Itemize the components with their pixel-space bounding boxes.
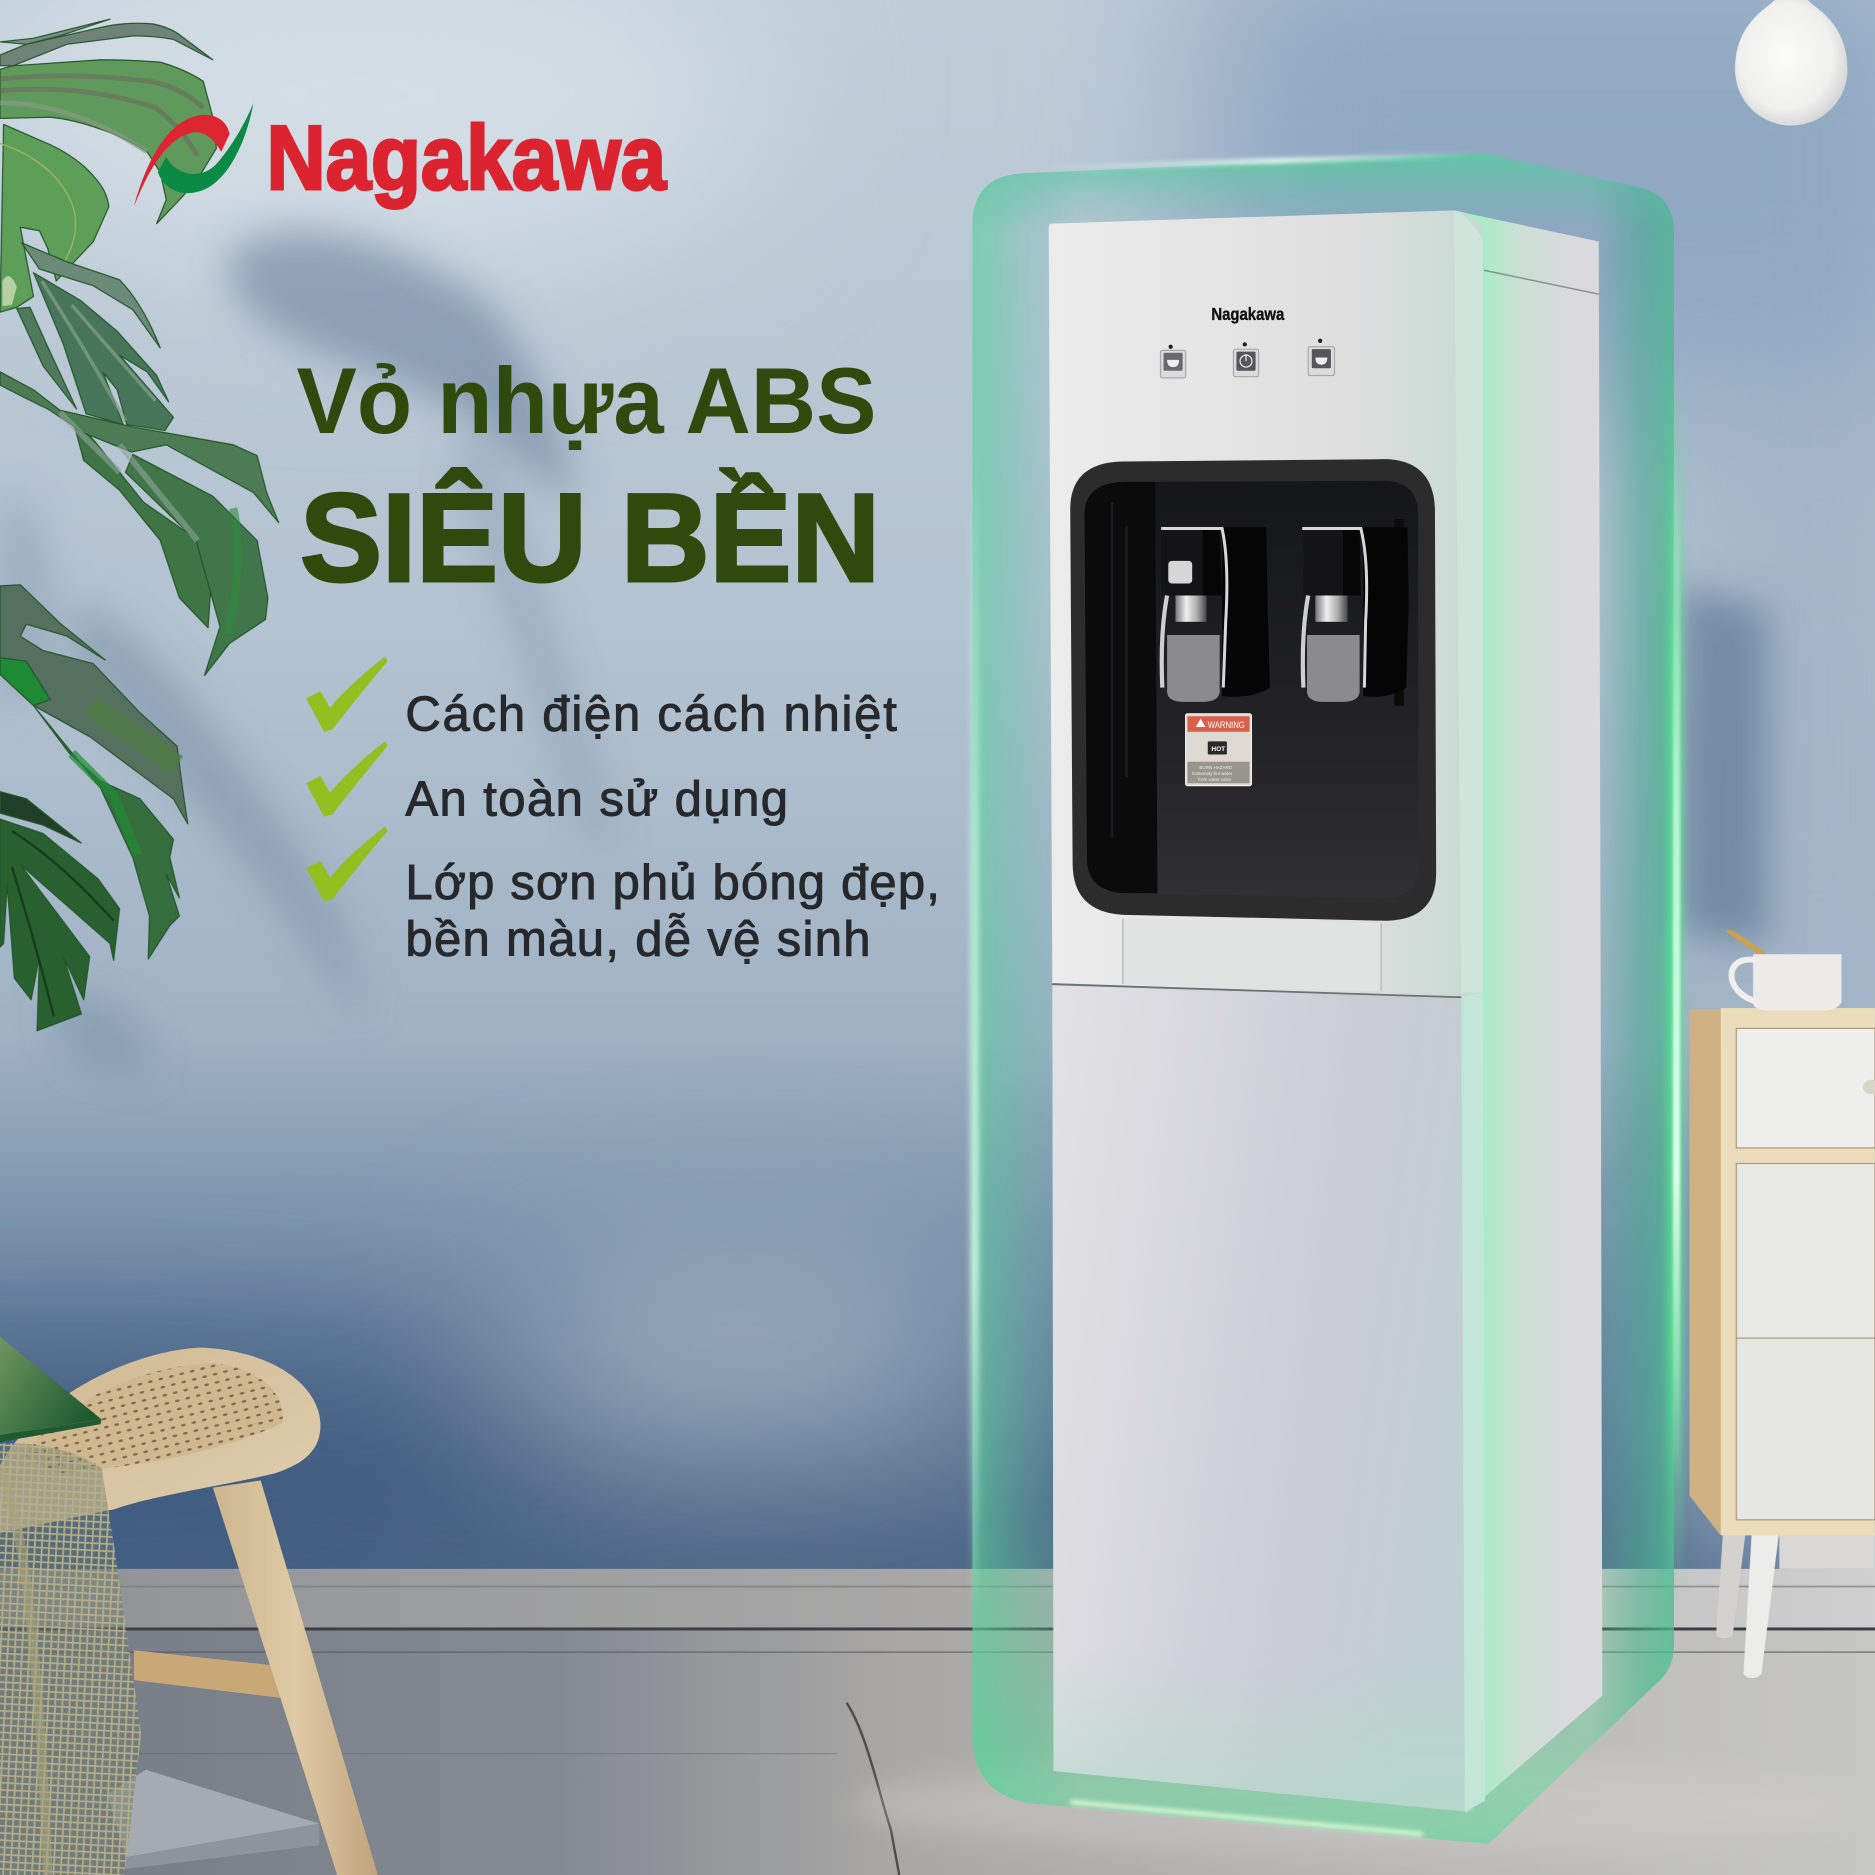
pendant light bulb [1735,0,1847,126]
logo [134,103,667,209]
button: power [1233,342,1259,377]
benefit 3 [405,856,940,966]
control buttons [1161,339,1335,378]
benefit 3: Lớp sơn phủ bóng đẹp, [405,856,940,910]
leaf: rounded lobe [0,124,109,312]
side cabinet with cup [1690,930,1875,1678]
leaf: top thin fronds [0,19,213,66]
warning sticker: Extremely hot water [1192,771,1233,776]
brand name on dispenser: Nagakawa [1211,304,1285,324]
leaf: small fronds [17,243,160,409]
stool seat [0,1348,320,1533]
benefits list [306,656,940,966]
logo mark [134,103,254,207]
stool [0,1337,378,1875]
cabinet legs [1716,1531,1875,1678]
warning sticker: from water valve [1198,777,1232,782]
book on stool [0,1337,102,1442]
cabinet body [1690,1008,1875,1535]
title line 1: Vỏ nhựa ABS [297,349,877,453]
glow line: top [1028,154,1483,169]
leaf: top broad [0,60,216,224]
dispenser upper front [1049,210,1483,997]
leaf: bottom monstera [0,792,120,1031]
drip tray front [1123,918,1381,991]
title line 2: SIÊU BỀN [300,467,880,608]
dispenser side panel [1454,210,1602,1813]
warning sticker: BURN HAZARD [1199,765,1233,770]
leaf: upper monstera [33,273,173,430]
left faucet [1161,527,1270,702]
check mark 2 [306,741,387,817]
warning sticker: HOT [1211,746,1225,753]
benefit 1: Cách điện cách nhiệt [405,688,897,742]
floor plate [108,1770,319,1869]
right faucet [1302,527,1409,702]
glow line: bottom [1070,1802,1423,1834]
button: cold [1308,339,1335,375]
water dispenser [1049,210,1602,1813]
benefit 3: bền màu, dễ vệ sinh [405,911,871,966]
glow line: right [1667,359,1684,1602]
leaf: lower monstera [0,585,188,959]
green glow box around the dispenser [971,143,1684,1865]
button: hot [1161,345,1186,378]
warning sticker [1186,714,1251,786]
logo wordmark: Nagakawa [267,108,667,209]
net cloth [0,1443,141,1875]
glow line: left [971,430,978,1626]
title [297,349,880,608]
leaf: large monstera [0,372,279,676]
plant leaves on the left [0,19,279,1031]
dispenser lower front [1052,984,1485,1812]
check mark 3 [306,826,387,902]
warning sticker: WARNING [1208,720,1245,730]
benefit 2: An toàn sử dụng [405,773,788,827]
floor and baseboard [0,1569,1875,1875]
check mark 1 [306,656,387,732]
dispensing recess [1070,459,1436,921]
stool leg and stretcher [134,1480,378,1875]
cup and spoon [1726,930,1842,1010]
